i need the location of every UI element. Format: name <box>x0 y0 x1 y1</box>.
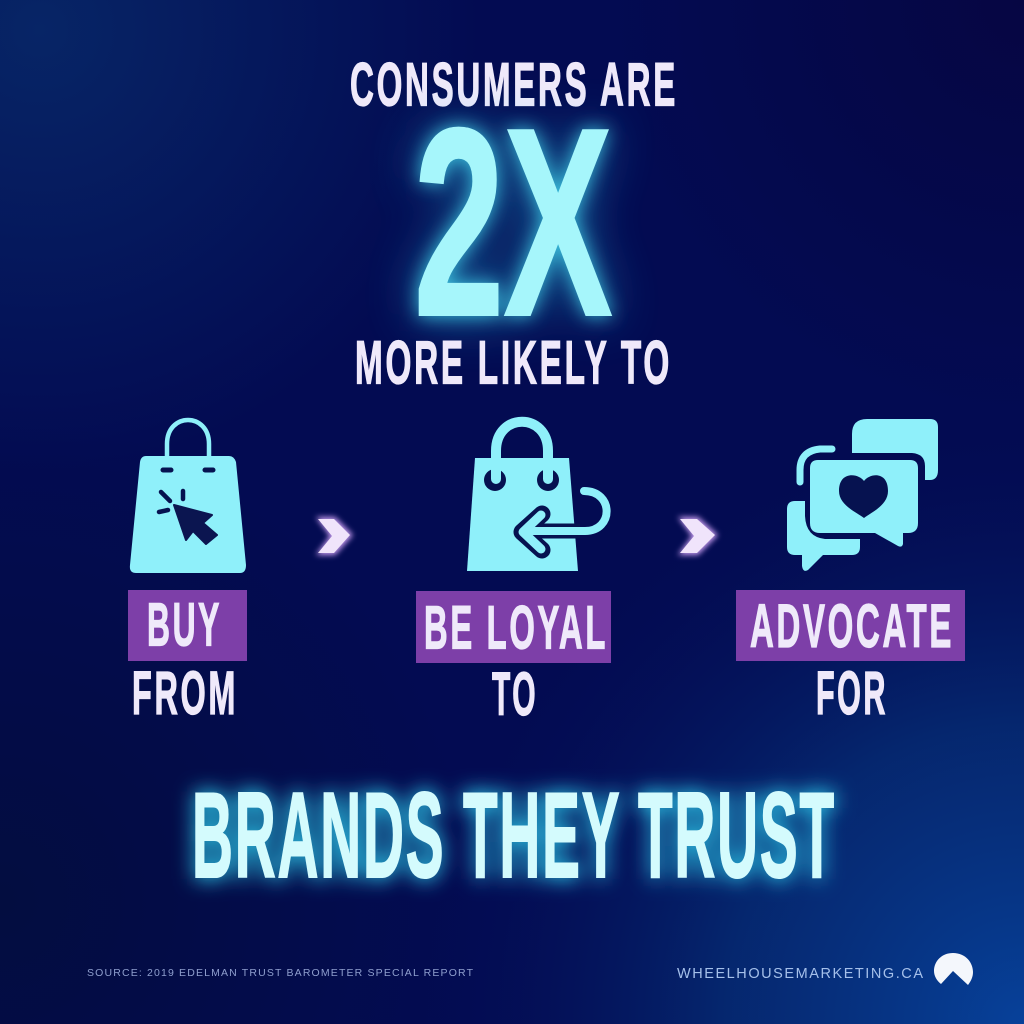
icon: bag with return arrow <box>467 422 607 571</box>
text: TO <box>492 660 538 728</box>
heading: more likely to: MORE LIKELY TO <box>355 328 672 396</box>
label: be loyal: BE LOYAL <box>424 594 608 662</box>
big number: 2X: 2X <box>414 72 613 372</box>
big number: 2X: 2X <box>414 72 613 372</box>
label: for: FOR <box>816 659 888 727</box>
label box: buy <box>128 590 247 661</box>
big number: 2X: 2X <box>414 72 613 372</box>
arrow: chevron 1 <box>316 517 353 555</box>
label box: be loyal <box>416 591 611 663</box>
label: buy: BUY <box>147 590 222 658</box>
website url: WHEELHOUSEMARKETING.CA <box>677 966 923 982</box>
label box: advocate <box>736 590 965 661</box>
heading: consumers are: CONSUMERS ARE <box>350 50 678 118</box>
logo <box>934 953 973 985</box>
icon: shopping bag with cursor <box>130 420 246 573</box>
icon: chat bubbles with heart <box>787 419 938 571</box>
arrow: chevron 2 <box>678 517 718 555</box>
label: from: FROM <box>132 659 238 727</box>
big number: 2X <box>414 72 613 372</box>
source note: SOURCE: 2019 EDELMAN TRUST BAROMETER SPECIAL REPORT <box>87 967 474 979</box>
